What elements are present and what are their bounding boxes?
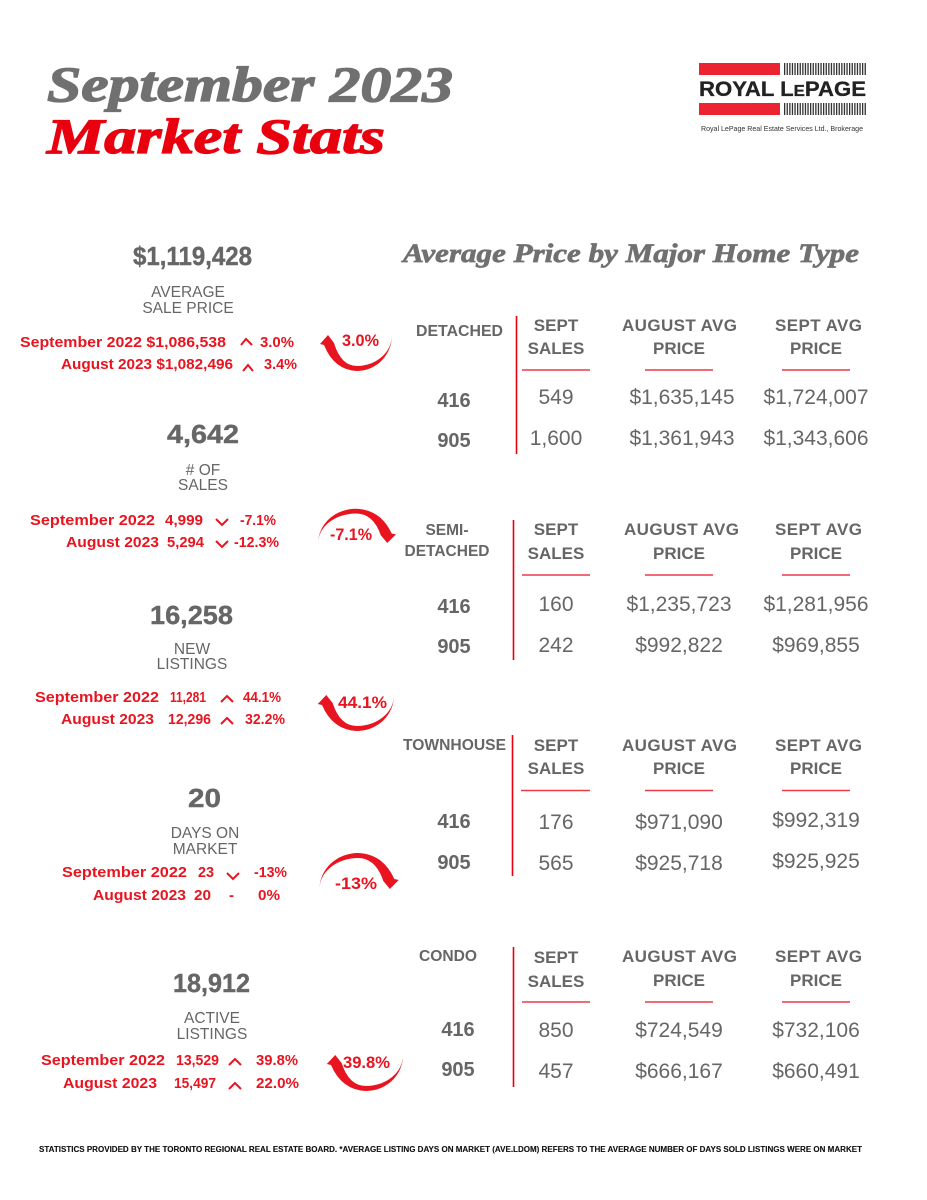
table: townhouse: 176 [538,811,574,834]
table: detached: DETACHED [416,323,503,340]
table: semi-detached: SEPT AVG [775,520,862,539]
table: semi-detached: SEMI- [425,522,469,539]
logo: Royal LePage: Royal LePage Real Estate Services Ltd., Brokerage [701,124,863,133]
comparison: August 2023: 20 [194,887,211,904]
stat label: # OF [186,462,220,479]
stat label: LISTINGS [177,1026,247,1043]
comparison: September 2022: 3.0% [260,334,294,351]
comparison: August 2023: August 2023 [61,711,154,728]
table: semi-detached: $1,235,723 [626,593,732,616]
table: townhouse [403,735,862,876]
comparison: September 2022: September 2022 [35,689,159,706]
table: detached: 905 [437,430,471,452]
table: detached: AUGUST AVG [622,316,737,335]
panel: new listings [35,600,394,731]
table: condo: $732,106 [772,1019,860,1042]
table: detached: 416 [437,390,471,412]
panel: days on market [62,783,399,904]
table: townhouse: AUGUST AVG [622,736,737,755]
table: semi-detached: PRICE [790,544,842,563]
table: semi-detached: AUGUST AVG [624,520,739,539]
table: condo: $666,167 [635,1060,723,1083]
comparison: August 2023: August 2023 $1,082,496 [61,356,233,373]
arrow: up 39.8% [327,1054,403,1091]
table: detached: SEPT AVG [775,316,862,335]
title: Market Stats [46,108,385,164]
table: semi-detached: 416 [437,596,471,618]
arrow: up 39.8%: 39.8% [343,1054,390,1072]
stat label: LISTINGS [157,656,227,673]
comparison: September 2022: 23 [198,864,214,881]
comparison: September 2022: September 2022 [30,512,155,529]
table: detached: $1,635,145 [629,386,735,409]
footer note: STATISTICS PROVIDED BY THE TORONTO REGIONAL REAL ESTATE BOARD. *AVERAGE LISTING DAYS ON MARKET (AVE.LDOM) REFERS TO THE AVERAGE NUMBER OF DAYS SOLD LISTINGS WERE ON MARKET [39,1145,862,1154]
comparison: August 2023: August 2023 [93,887,186,904]
table: condo: SEPT AVG [775,947,862,966]
table: semi-detached: 160 [538,593,574,616]
table: semi-detached: 905 [437,636,471,658]
stat label: ACTIVE [184,1010,240,1027]
logo: Royal LePage [699,63,866,133]
table: townhouse: $925,718 [635,852,723,875]
table: detached: $1,343,606 [763,427,869,450]
comparison: September 2022: 39.8% [256,1052,298,1069]
table: semi-detached: DETACHED [405,543,489,560]
comparison: August 2023: 32.2% [245,711,285,728]
comparison: September 2022: 13,529 [176,1052,219,1069]
comparison: September 2022 [41,1052,298,1069]
stat value: 16,258 [150,600,233,630]
comparison: September 2022: 44.1% [243,689,281,706]
table: detached: $1,724,007 [763,386,869,409]
table: condo: $724,549 [635,1019,723,1042]
table: townhouse: 905 [437,852,471,874]
comparison: August 2023: August 2023 [66,534,159,551]
stat label [178,462,228,494]
comparison: August 2023: August 2023 [63,1075,157,1092]
table: condo: PRICE [653,971,705,990]
stat label: SALE PRICE [142,300,234,317]
table: townhouse: SEPT [534,736,579,755]
panel: average sale price [20,241,392,373]
arrow: down -7.1%: -7.1% [330,526,372,544]
comparison: September 2022 [35,689,281,706]
table: semi-detached [405,520,869,660]
stat label: DAYS ON [171,825,239,842]
table: detached: 549 [538,386,574,409]
comparison: September 2022: 4,999 [165,512,203,529]
stat value: 4,642 [167,419,239,449]
stat label: NEW [174,641,210,658]
table: semi-detached: SEPT [534,520,579,539]
table: condo: 850 [538,1019,574,1042]
table: townhouse: SALES [528,759,584,778]
stat label [177,1010,247,1043]
stat label: AVERAGE [151,284,225,301]
table: townhouse: 565 [538,852,574,875]
stat label [157,641,227,673]
comparison: September 2022: -7.1% [240,512,276,529]
table: condo: SALES [528,972,584,991]
stat label [171,825,239,858]
arrow: up 3.0%: 3.0% [342,332,379,350]
table: semi-detached: SALES [528,544,584,563]
table: condo: $660,491 [772,1060,860,1083]
comparison: September 2022: -13% [254,864,287,881]
comparison: September 2022: September 2022 [41,1052,165,1069]
table: condo: AUGUST AVG [622,947,737,966]
arrow: down -7.1% [318,509,396,544]
title: September 2023 [47,56,453,112]
table: condo: 416 [441,1019,475,1041]
stat label: SALES [178,477,228,494]
table: townhouse: $971,090 [635,811,723,834]
table: condo: 905 [441,1059,475,1081]
table: condo: PRICE [790,971,842,990]
table: detached: PRICE [653,339,705,358]
comparison: September 2022: September 2022 $1,086,538 [20,334,226,351]
table: detached: 1,600 [530,427,582,450]
stat value: 20 [188,783,221,813]
table: townhouse: PRICE [790,759,842,778]
arrow: down -13%: -13% [335,875,377,893]
panel: active listings [41,968,403,1092]
table: condo: 457 [538,1060,574,1083]
stat value: 18,912 [173,968,250,998]
comparison: August 2023: 5,294 [167,534,205,551]
comparison: September 2022: September 2022 [62,864,187,881]
table: semi-detached: $1,281,956 [763,593,869,616]
table: condo: CONDO [419,948,477,965]
table: townhouse: $992,319 [772,809,860,832]
comparison: August 2023: 0% [258,887,280,904]
table: townhouse: $925,925 [772,850,860,873]
table: townhouse: SEPT AVG [775,736,862,755]
comparison: August 2023 [61,711,285,728]
table: detached: PRICE [790,339,842,358]
table: semi-detached: $992,822 [635,634,723,657]
logo: Royal LePage: ROYAL L EPAGE [699,78,866,101]
comparison: September 2022 [30,512,276,529]
comparison: August 2023: -12.3% [234,534,279,551]
table: semi-detached: $969,855 [772,634,860,657]
panel: number of sales [30,419,396,551]
table: townhouse: PRICE [653,759,705,778]
title [46,56,453,164]
table: townhouse: 416 [437,811,471,833]
table: townhouse: TOWNHOUSE [403,737,506,754]
arrow: up 44.1%: 44.1% [338,694,387,712]
comparison: August 2023: 3.4% [264,356,297,373]
comparison: August 2023 [63,1075,299,1092]
table: detached: SEPT [534,316,579,335]
table: condo [419,947,862,1087]
table: semi-detached: PRICE [653,544,705,563]
stat value: $1,119,428 [133,241,252,271]
arrow: down -13% [320,853,399,893]
comparison: September 2022: 11,281 [170,689,206,706]
comparison: August 2023 [93,887,280,904]
heading: average price by major home type: Average Price by Major Home Type [401,239,859,268]
comparison: August 2023: 12,296 [168,711,211,728]
table: detached [416,316,869,454]
arrow: up 44.1% [318,694,394,731]
table: detached: $1,361,943 [629,427,735,450]
comparison: August 2023: - [229,887,234,904]
comparison: August 2023: 15,497 [174,1075,216,1092]
comparison: August 2023: 22.0% [256,1075,299,1092]
table: condo: SEPT [534,948,579,967]
table: detached: SALES [528,339,584,358]
stat label: MARKET [173,841,238,858]
stat label [142,284,234,317]
table: semi-detached: 242 [538,634,574,657]
comparison: August 2023 [66,534,279,551]
arrow: up 3.0% [320,332,392,371]
comparison: September 2022 [62,864,287,881]
